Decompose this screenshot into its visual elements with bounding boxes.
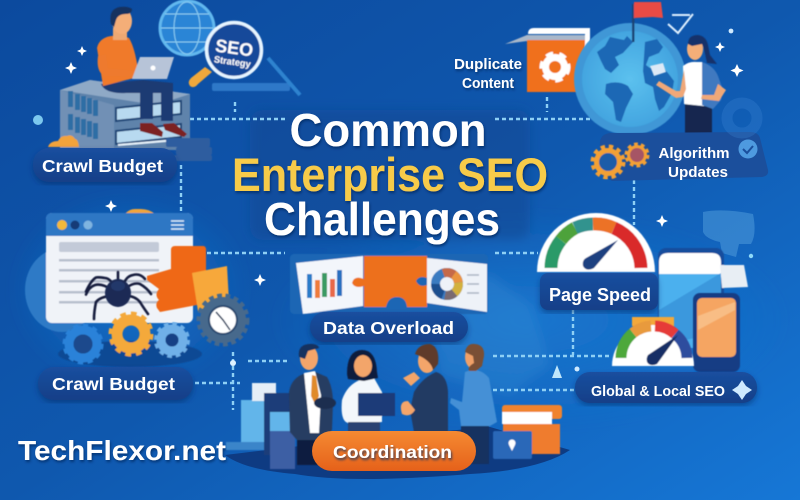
stacked plates [166,138,212,161]
pill: data overload: Data Overload [323,318,454,338]
person 2 [342,350,395,436]
title: Challenges [264,193,500,245]
team of people [289,344,497,465]
pill: crawl budget top [33,148,177,182]
brand text: TechFlexor.net [18,435,226,466]
pill: global and local seo: Global & Local SEO [591,383,725,400]
faint gear [727,103,757,133]
crawl gears [58,314,202,367]
sparkles [65,29,753,378]
background glows [10,110,790,430]
label: algorithm updates: Algorithm [658,146,730,162]
base shadow [225,427,570,479]
dashed connector lines [181,97,634,410]
woman presenting [650,35,726,136]
faint speech shape [703,210,755,257]
globe with flag [574,2,693,135]
person 3 [401,344,448,432]
label: algorithm updates [658,146,730,181]
SEO Strategy label: SEO [214,35,254,61]
puzzle pieces [147,246,229,312]
pill: page speed: Page Speed [549,285,651,305]
duplicate content book [505,28,590,92]
person 1 [289,344,336,465]
gauge small [612,317,694,366]
data overload cards [290,254,488,314]
label: duplicate content [454,57,522,92]
browser window with spider [25,209,193,332]
icon: spider [86,272,151,319]
dot marker [33,115,43,125]
orange pile [48,135,79,147]
SEO Strategy label: Strategy [213,54,252,70]
speedometer large [537,213,655,272]
server building [60,80,190,150]
pill: coordination: Coordination [333,442,452,462]
person 4 [450,344,497,464]
title: Common [290,104,486,156]
pill: data overload [310,312,468,342]
label: duplicate content: Content [462,76,514,92]
left servers [226,383,295,469]
label: duplicate content: Duplicate [454,57,522,73]
small phone [693,293,740,372]
phone large [658,248,748,348]
person sitting [97,7,187,137]
title: Enterprise SEO [232,148,548,201]
pill: page speed [540,273,658,310]
pill: crawl budget bottom [38,367,193,400]
folders right [493,405,562,459]
clock gear [200,297,246,343]
label: algorithm updates: Updates [668,165,728,181]
pill: crawl budget bottom: Crawl Budget [52,374,175,394]
magnifier with globe [160,1,300,95]
SEO Strategy label [213,35,255,70]
illustration: person on server [48,1,300,161]
gears [594,145,647,176]
title [232,104,548,245]
diamond sparkle [732,380,752,400]
pill: coordination [312,431,476,471]
check badge [738,140,758,158]
pill: global and local seo [575,372,757,403]
pill: crawl budget top: Crawl Budget [42,156,163,176]
algorithm updates banner [594,132,768,181]
